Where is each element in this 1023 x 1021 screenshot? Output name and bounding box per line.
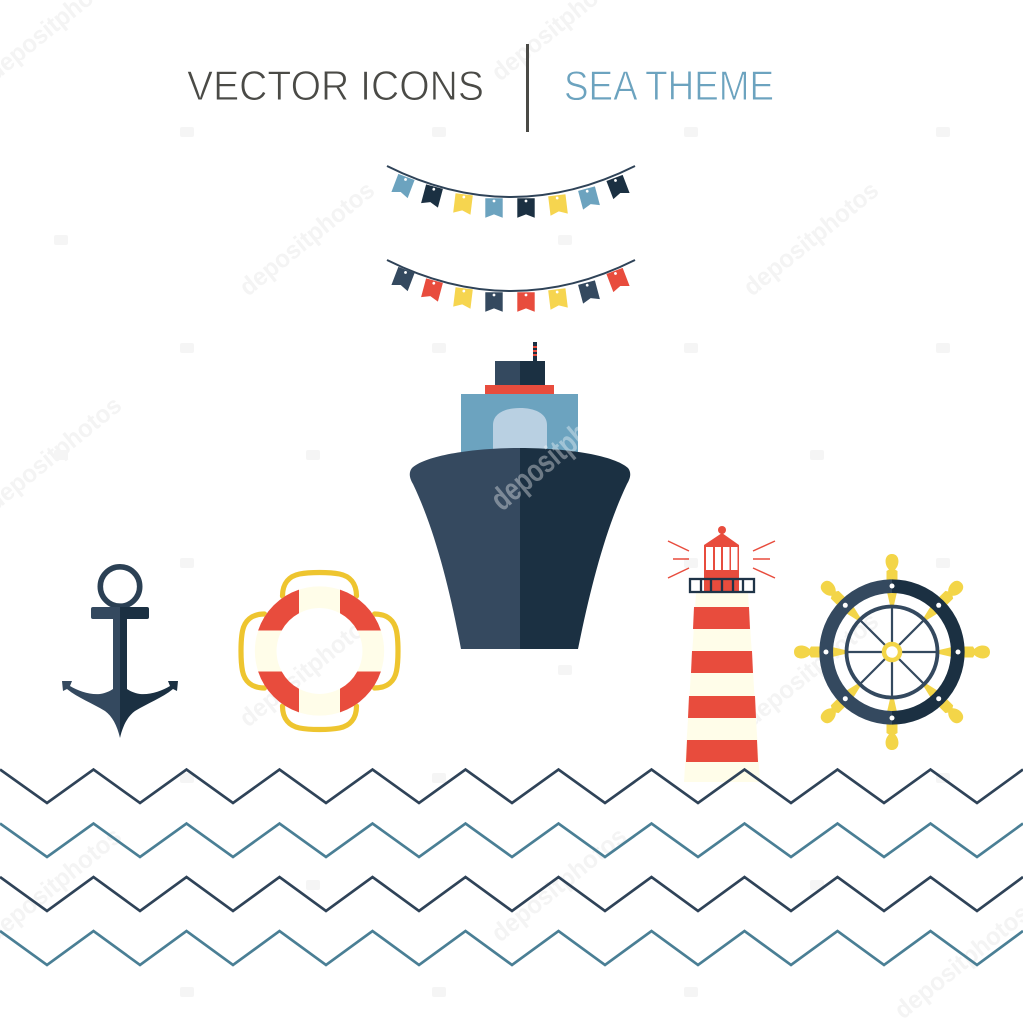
ship red deck <box>485 385 554 394</box>
watermark on ship: depositphotos <box>483 382 635 517</box>
waves: navy third <box>0 877 1023 911</box>
anchor crossbar <box>91 607 149 619</box>
title: sea theme: SEA THEME <box>564 62 774 109</box>
icon: life buoy <box>241 572 398 730</box>
text: depositphotos <box>738 607 884 733</box>
anchor shank and arms <box>62 607 178 738</box>
lighthouse lantern <box>704 526 739 592</box>
lighthouse railing <box>690 579 754 592</box>
ship hull <box>410 448 630 649</box>
lighthouse tower <box>684 593 760 782</box>
text: depositphotos <box>234 607 380 733</box>
icon: ship <box>410 342 635 649</box>
wheel rivets <box>824 584 960 720</box>
lighthouse stripes <box>686 607 758 762</box>
ship mast <box>533 342 537 361</box>
wheel inner ring and spokes <box>846 606 938 698</box>
text: depositphotos <box>738 176 884 302</box>
waves: teal bottom <box>0 931 1023 965</box>
title: vector icons: VECTOR ICONS <box>187 62 484 109</box>
lighthouse light rays <box>668 541 775 578</box>
icon: anchor <box>62 567 178 738</box>
bunting: top garland <box>387 166 635 218</box>
ship funnel <box>495 361 545 385</box>
buoy ropes <box>241 572 398 730</box>
ship cabin <box>461 394 578 454</box>
anchor ring <box>100 567 140 606</box>
title <box>187 44 774 132</box>
wheel handles <box>794 554 990 750</box>
buoy ring <box>266 597 373 705</box>
text: depositphotos <box>234 176 380 302</box>
title divider <box>526 44 529 132</box>
wheel outer ring <box>826 586 958 718</box>
waves: navy top <box>0 770 1023 803</box>
waves: teal second <box>0 824 1023 857</box>
icon: ship wheel <box>794 554 990 750</box>
bunting: bottom garland <box>387 260 635 312</box>
wheel hub <box>884 644 900 660</box>
buoy red segments <box>258 590 381 712</box>
text: depositphotos <box>486 822 632 948</box>
icon: lighthouse <box>668 526 775 782</box>
ship window <box>493 408 547 450</box>
